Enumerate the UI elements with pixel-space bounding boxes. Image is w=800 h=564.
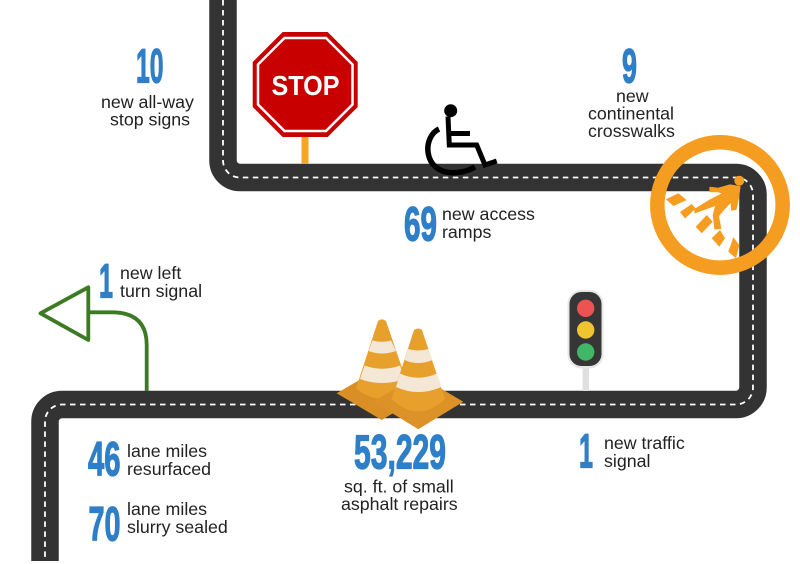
stat: 70 lane miles slurry sealed	[88, 498, 228, 552]
stat: 46 lane miles resurfaced: resurfaced	[127, 459, 211, 479]
stat: 1 new left turn signal: turn signal	[120, 281, 202, 301]
stat: 53,229 sq. ft. of small asphalt repairs	[341, 426, 458, 514]
stat: 69 new access ramps: new access	[442, 204, 535, 224]
stat: 10 new all-way stop signs: new all-way	[101, 92, 194, 112]
stat: 46 lane miles resurfaced: lane miles	[127, 441, 207, 461]
stat: 70 lane miles slurry sealed: slurry sealed	[127, 517, 228, 537]
stat: 1 new traffic signal: signal	[604, 451, 650, 471]
stat: 9 new continental crosswalks: new	[616, 86, 649, 106]
stat: 69 new access ramps: ramps	[442, 222, 492, 242]
stat: 46 lane miles resurfaced: 46	[88, 434, 120, 486]
stat: 1 new traffic signal: new traffic	[604, 433, 685, 453]
stat: 46 lane miles resurfaced	[88, 434, 211, 486]
stat: 10 new all-way stop signs: 10	[136, 40, 164, 94]
icon: traffic light	[568, 290, 604, 391]
stat: 53,229 sq. ft. of small asphalt repairs: sq. ft. of small	[344, 476, 454, 496]
stat: 69 new access ramps: 69	[404, 198, 437, 252]
stat: 9 new continental crosswalks: 9	[622, 40, 637, 94]
stat: 1 new left turn signal: new left	[120, 263, 181, 283]
stat: 9 new continental crosswalks: crosswalks	[588, 121, 675, 141]
icon: stop sign: STOP	[272, 70, 340, 101]
stat: 1 new traffic signal: 1	[579, 426, 593, 478]
icon: left turn arrow	[40, 287, 147, 391]
icon: wheelchair	[428, 104, 497, 173]
stat: 1 new traffic signal	[579, 426, 685, 478]
stat: 10 new all-way stop signs	[101, 40, 194, 130]
icon: traffic cones	[337, 319, 463, 429]
stat: 53,229 sq. ft. of small asphalt repairs: asphalt repairs	[341, 494, 458, 514]
stat: 53,229 sq. ft. of small asphalt repairs: 53,229	[354, 426, 446, 480]
stat: 10 new all-way stop signs: stop signs	[110, 110, 190, 130]
stat: 1 new left turn signal	[99, 256, 202, 308]
stat: 1 new left turn signal: 1	[99, 256, 113, 308]
stat: 9 new continental crosswalks: continental	[588, 104, 674, 124]
stat: 69 new access ramps	[404, 198, 535, 252]
stat: 70 lane miles slurry sealed: 70	[88, 498, 120, 552]
icon: stop sign	[253, 32, 358, 164]
stat: 9 new continental crosswalks	[588, 40, 675, 141]
stat: 70 lane miles slurry sealed: lane miles	[127, 499, 207, 519]
icon: pedestrian crossing	[657, 142, 783, 268]
